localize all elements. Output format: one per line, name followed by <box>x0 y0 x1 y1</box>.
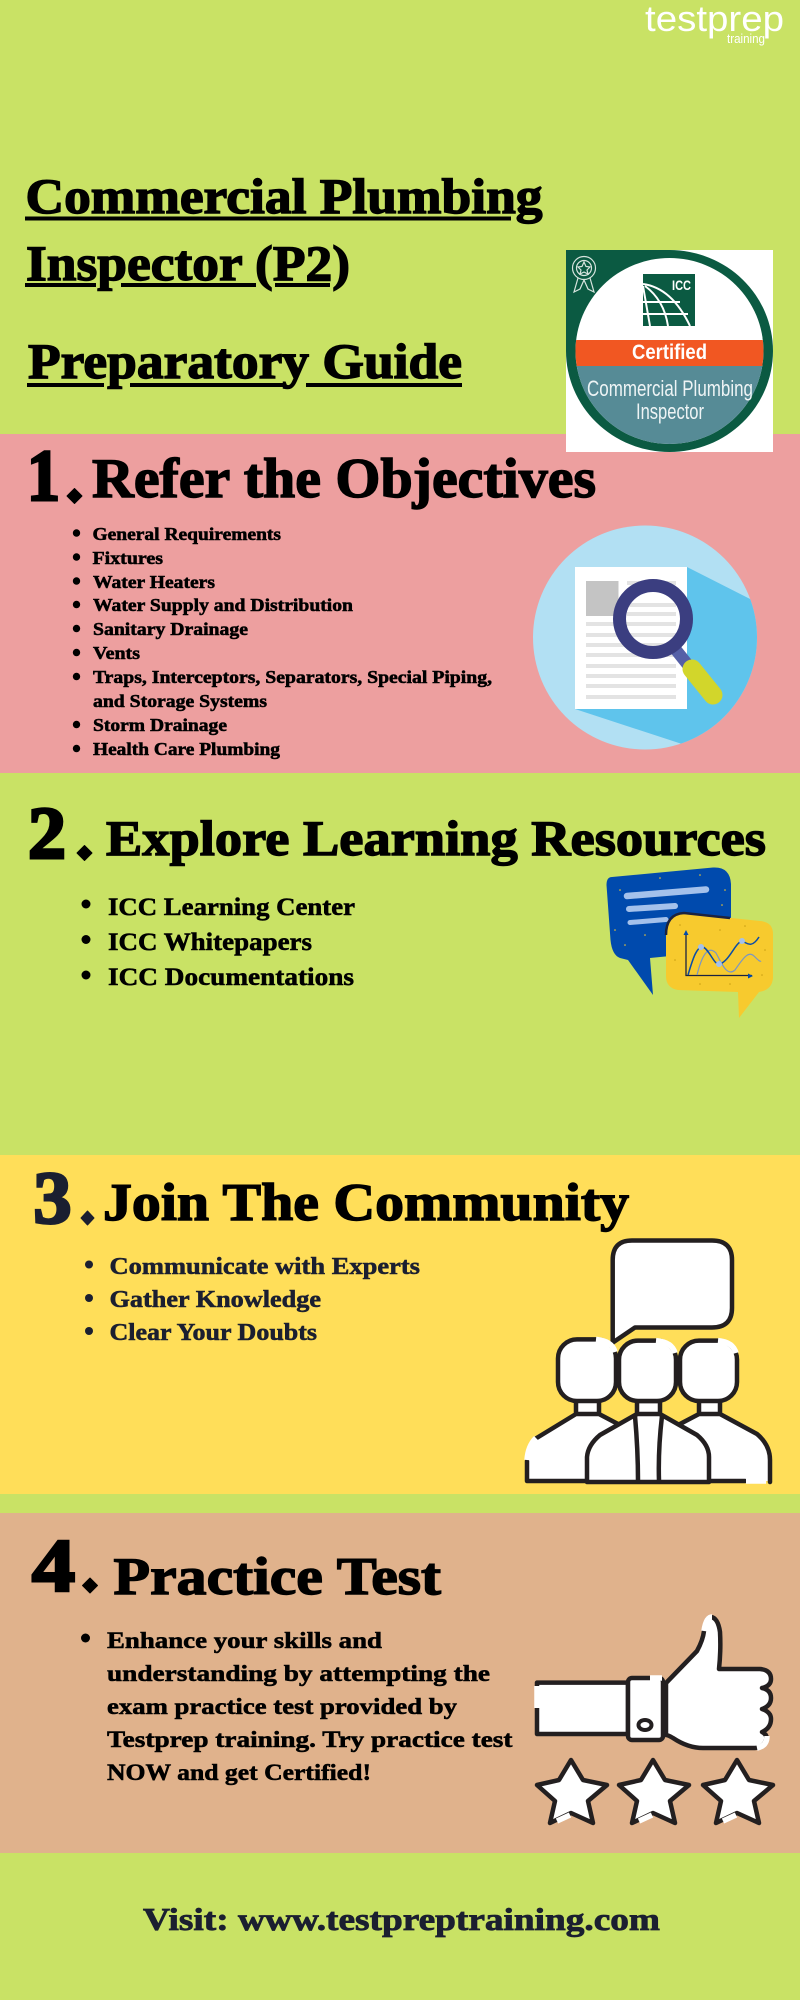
title: Preparatory Guide <box>28 333 462 389</box>
heading: step 3: 3 <box>34 1158 72 1240</box>
panel: step 4 practice test <box>0 1513 800 1853</box>
title <box>25 168 542 389</box>
icon: award seal <box>572 256 596 292</box>
icon: thumbs up with sleeve <box>537 1617 771 1748</box>
icon: ICC globe logo <box>643 274 695 326</box>
heading: step 4: 4 <box>32 1525 75 1608</box>
list: learning resources: ICC Documentations <box>108 964 354 991</box>
heading: step 3 <box>34 1158 629 1240</box>
panel: step 1 refer the objectives <box>0 434 800 773</box>
badge: ICC certified commercial plumbing inspector: Inspector <box>636 399 704 424</box>
list: objectives: Storm Drainage <box>93 715 227 735</box>
list: practice test text: NOW and get Certified! <box>107 1760 371 1786</box>
list: objectives: Fixtures <box>92 548 163 568</box>
list: objectives: Sanitary Drainage <box>93 619 248 639</box>
list: objectives <box>73 524 492 759</box>
list: community benefits: Communicate with Experts <box>110 1254 420 1280</box>
heading: step 4: Practice Test <box>114 1548 441 1606</box>
heading: step 3: Join The Community <box>103 1174 629 1232</box>
badge: ICC certified commercial plumbing inspector: Certified <box>632 341 707 364</box>
list: practice test text: exam practice test provided by <box>107 1694 457 1720</box>
badge: ICC certified commercial plumbing inspector <box>560 250 780 456</box>
list: objectives: Water Supply and Distribution <box>93 595 353 615</box>
title: Commercial Plumbing <box>26 168 542 224</box>
list: objectives: Health Care Plumbing <box>93 739 280 759</box>
panel: footer <box>0 1853 800 2000</box>
list: objectives: General Requirements <box>92 524 281 544</box>
list: community benefits: Gather Knowledge <box>110 1287 321 1313</box>
list: objectives: Traps, Interceptors, Separators, Special Piping, <box>93 667 492 687</box>
list: practice test text: understanding by attempting the <box>107 1661 490 1687</box>
heading: step 2: 2 <box>28 793 66 875</box>
footer link text: Visit: www.testpreptraining.com <box>143 1901 660 1937</box>
panel: step 2 explore learning resources <box>0 773 800 1155</box>
list: objectives: Water Heaters <box>93 572 215 592</box>
icon: three stars <box>537 1760 773 1823</box>
list: objectives: Vents <box>93 643 140 663</box>
heading: step 2: Explore Learning Resources <box>106 810 766 866</box>
list: community benefits <box>85 1254 420 1346</box>
list: community benefits: Clear Your Doubts <box>110 1320 317 1346</box>
badge: ICC certified commercial plumbing inspector: Commercial Plumbing <box>587 376 753 401</box>
icon: chat bubbles with chart <box>606 867 773 1018</box>
icon: document and magnifying glass <box>533 526 770 760</box>
list: practice test text: Enhance your skills and <box>107 1628 382 1654</box>
list: learning resources: ICC Learning Center <box>108 894 355 921</box>
list: practice test text: Testprep training. Try practice test <box>107 1727 513 1753</box>
heading: step 1 <box>27 435 596 516</box>
list: practice test text <box>81 1628 513 1786</box>
icon: ICC globe logo: ICC <box>672 277 691 293</box>
panel: step 3 join the community <box>0 1155 800 1494</box>
list: learning resources <box>82 894 355 991</box>
heading: step 1: Refer the Objectives <box>92 448 596 510</box>
heading: step 2 <box>28 793 766 875</box>
heading: step 4 <box>32 1525 441 1608</box>
divider band <box>0 1494 800 1513</box>
logo: testprep training: training <box>727 31 765 46</box>
list: objectives: and Storage Systems <box>93 691 267 711</box>
panel: header <box>0 0 800 434</box>
heading: step 1: 1 <box>27 435 60 516</box>
title: Inspector (P2) <box>26 235 350 291</box>
icon: three people with speech bubble <box>527 1240 770 1482</box>
list: learning resources: ICC Whitepapers <box>108 929 312 956</box>
